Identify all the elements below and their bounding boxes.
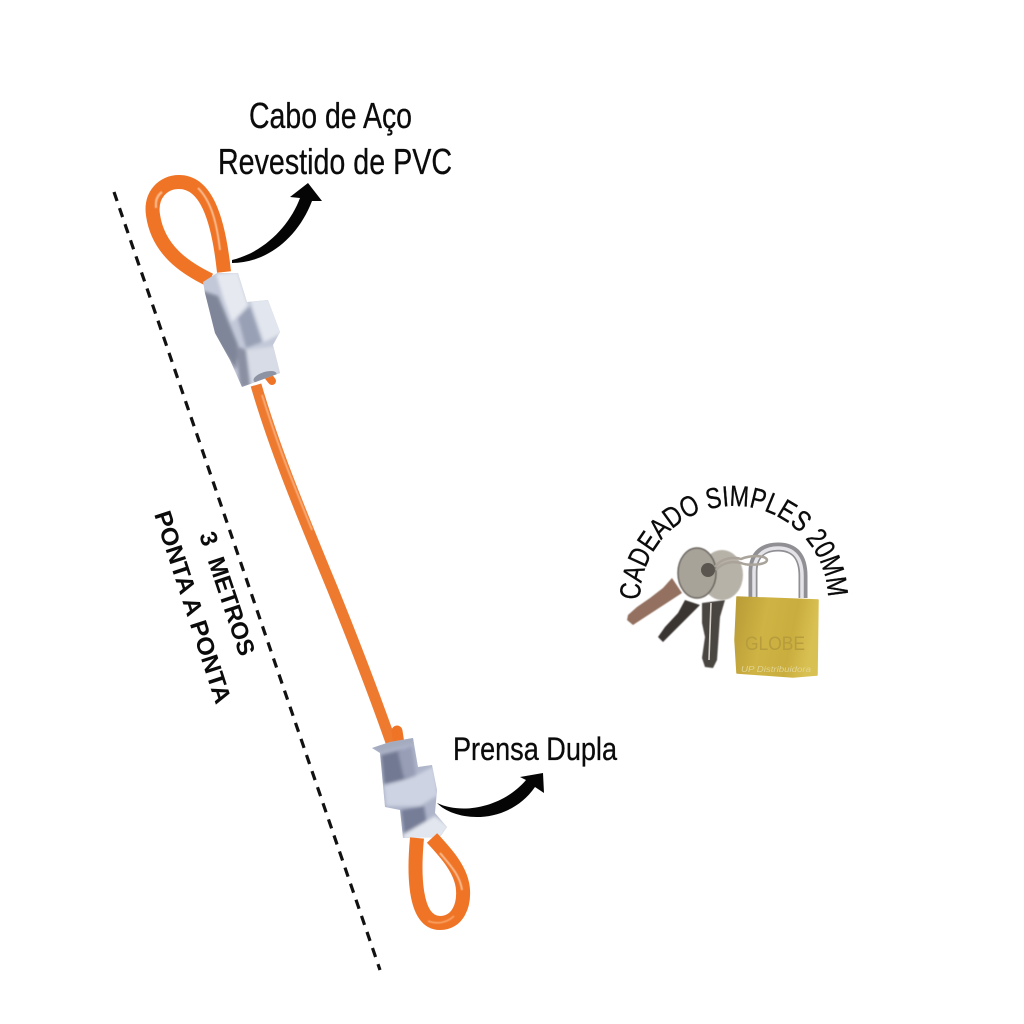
infographic canvas — [112, 102, 848, 970]
top loop — [153, 182, 224, 280]
heading: steel cable label: Cabo de Aço — [249, 95, 412, 136]
padlock brand: GLOBE — [745, 634, 805, 655]
key head front — [678, 548, 716, 598]
short tail bottom — [397, 731, 399, 744]
key head rear — [701, 550, 743, 600]
key: steel — [702, 600, 725, 668]
measurement label: 3 METROS — [193, 528, 260, 659]
bottom double crimp — [372, 738, 447, 838]
key highlight — [709, 603, 711, 660]
key head hole — [701, 563, 715, 577]
key: copper — [627, 578, 682, 625]
shackle — [753, 547, 803, 598]
watermark: UP Distribuidora — [741, 665, 812, 674]
cable span — [256, 385, 392, 745]
orange PVC coated cable with crimps — [153, 182, 463, 923]
heading: steel cable label — [218, 95, 452, 182]
arrow: cable label — [232, 183, 322, 263]
label: crimp: Prensa Dupla — [453, 731, 617, 767]
padlock and keys photo illustration — [627, 547, 818, 677]
padlock body — [735, 597, 818, 677]
curved padlock title: CADEADO SIMPLES 20MM — [620, 486, 848, 598]
heading: steel cable label: Revestido de PVC — [218, 141, 452, 182]
top double crimp — [203, 273, 280, 387]
key ring — [715, 556, 767, 570]
dashed measurement line — [114, 192, 380, 970]
key: dark — [658, 600, 700, 642]
measurement label: PONTA A PONTA — [148, 508, 236, 707]
bottom loop — [416, 838, 463, 923]
arrow: crimp label — [437, 773, 544, 817]
short tail top — [268, 376, 272, 381]
